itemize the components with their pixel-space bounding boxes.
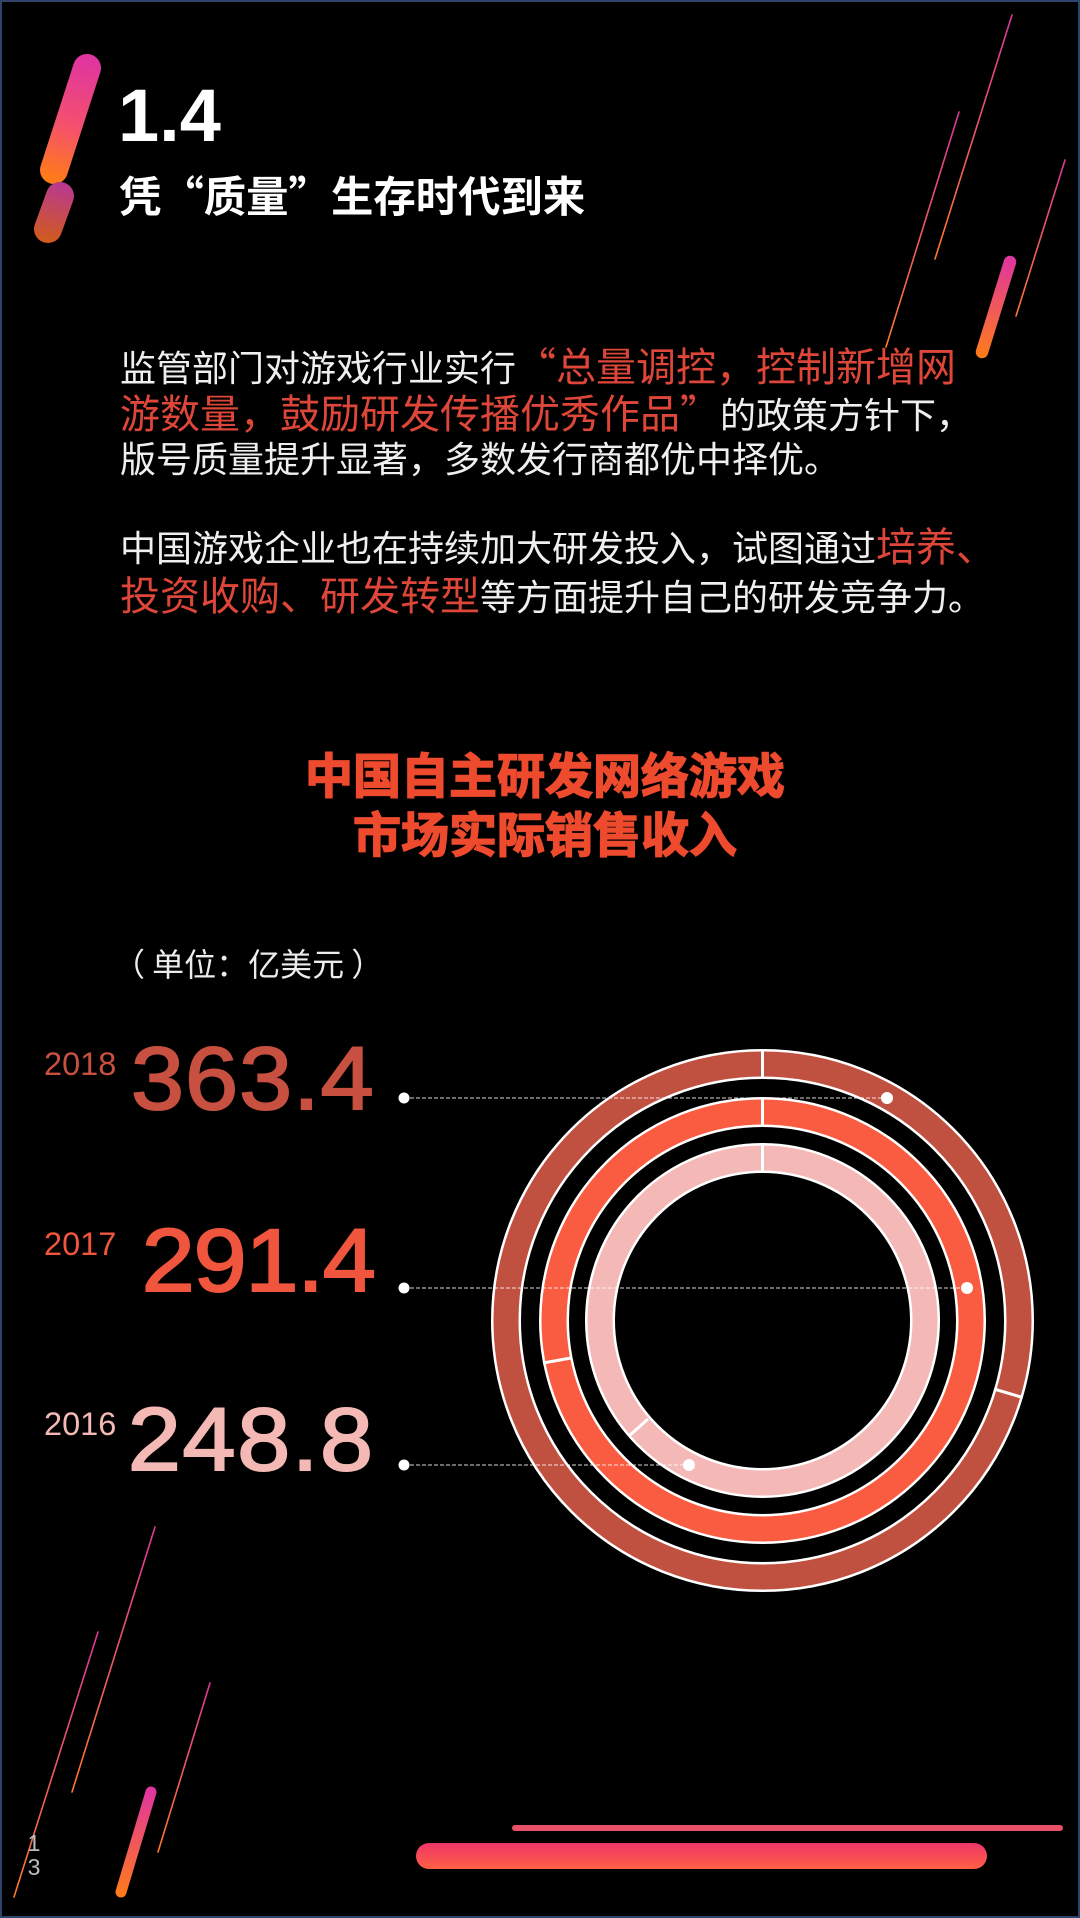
year and value: 2017: 2017 [44,1226,116,1262]
outer ring: 2018 [506,1049,1021,1577]
year and value: 2018: 363.4 [131,1028,375,1128]
chart title [305,737,785,866]
section number: 1.4 [118,74,221,157]
intro text block: 投资收购、研发转型等方面提升自己的研发竞争力。 [120,564,984,622]
page number: 3 [28,1854,40,1880]
intro text block: 监管部门对游戏行业实行“总量调控，控制新增网 [120,335,956,393]
year and value: 2016: 248.8 [128,1389,375,1489]
intro text block: 版号质量提升显著，多数发行商都优中择优。 [120,431,840,483]
page number: 1 [28,1830,40,1856]
year and value: 2018: 2018 [44,1046,116,1082]
inner ring: 2016 [600,1143,925,1483]
section title: 凭“质量”生存时代到来 [119,164,585,225]
intro text block: 游数量，鼓励研发传播优秀作品”的政策方针下， [120,382,972,440]
chart title: 市场实际销售收入 [353,796,737,866]
unit label: （ 单位：亿美元 ） [113,940,383,986]
year and value: 2017: 291.4 [142,1210,375,1310]
middle ring: 2017 [543,1097,971,1529]
year and value: 2016: 2016 [44,1406,116,1442]
intro text block [120,335,996,622]
intro text block: 中国游戏企业也在持续加大研发投入，试图通过培养、 [120,515,996,573]
page number [28,1830,40,1880]
chart title: 中国自主研发网络游戏 [305,737,785,807]
